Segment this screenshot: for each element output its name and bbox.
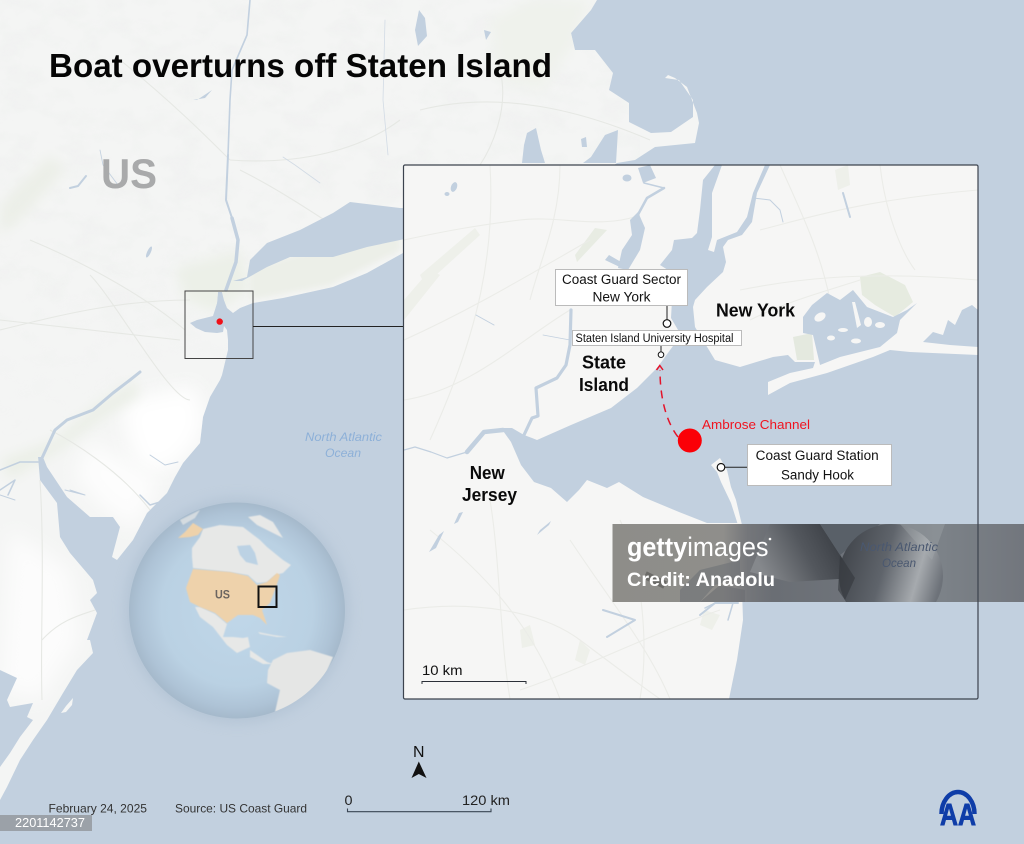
overview map: land xyxy=(0,0,699,800)
inset map panel xyxy=(404,165,978,699)
inset scale bar: 10 km: 10 km xyxy=(422,663,462,678)
overview locator box xyxy=(185,291,404,358)
inset: Jamaica Bay xyxy=(803,290,917,365)
watermark band: gettyimages credit: Credit: Anadolu xyxy=(627,570,775,591)
watermark band: gettyimages credit xyxy=(612,524,1024,602)
callout: Coast Guard Station Sandy Hook: Sandy Hook xyxy=(781,468,854,482)
inset dashed route arrow xyxy=(656,366,678,437)
inset: land xyxy=(404,165,978,699)
globe: United States xyxy=(186,569,280,625)
image id tag xyxy=(0,815,92,831)
inset ocean label under watermark: North Atlantic xyxy=(860,540,938,554)
image id tag: 2201142737 xyxy=(15,816,85,830)
inset: lakes and rivers xyxy=(429,165,656,552)
callout: Coast Guard Sector New York: New York xyxy=(592,290,651,304)
label: US: US xyxy=(101,150,157,197)
label: State Island xyxy=(579,352,629,395)
source: Source: US Coast Guard xyxy=(175,802,307,816)
north arrow: N xyxy=(413,744,424,761)
date: February 24, 2025 xyxy=(48,802,147,816)
inset ocean label under watermark: Ocean xyxy=(882,556,916,570)
label: State Island: State xyxy=(582,352,626,372)
inset: Jamaica Bay islands xyxy=(813,302,885,344)
label: New Jersey: New xyxy=(470,463,506,483)
globe: Mexico and Central America xyxy=(195,607,287,664)
inset: parks and urban tint xyxy=(404,165,913,665)
overview map: water bodies xyxy=(0,0,618,767)
callout: Coast Guard Station Sandy Hook: Coast Guard Station xyxy=(756,448,879,463)
globe locator box xyxy=(258,586,276,607)
inset scale bar: 10 km xyxy=(422,663,526,684)
overview scale bar: 120 km: 120 km xyxy=(462,793,510,808)
connector line to inset xyxy=(253,326,404,328)
label: New Jersey: Jersey xyxy=(462,485,517,505)
inset frame xyxy=(404,165,978,699)
ocean label: North Atlantic Ocean: North Atlantic xyxy=(305,430,382,444)
globe: Hudson Bay xyxy=(237,545,258,565)
ocean label: North Atlantic Ocean: Ocean xyxy=(325,446,361,460)
north arrow xyxy=(412,744,426,778)
globe: South America xyxy=(267,650,333,712)
overview scale bar: 120 km xyxy=(344,793,510,812)
locator red dot xyxy=(216,318,223,325)
globe inset xyxy=(124,498,350,724)
overview scale bar: 120 km: 0 xyxy=(344,793,352,808)
inset: roads xyxy=(404,165,978,699)
watermark band: gettyimages credit: gettyimages xyxy=(627,532,768,562)
inset: ocean, bays and rivers xyxy=(501,165,978,699)
label: State Island: Island xyxy=(579,375,629,395)
label: New York: New York xyxy=(716,300,796,320)
globe: Canada and Greenland xyxy=(180,510,291,583)
callout: Coast Guard Sector New York: Coast Guard Sector xyxy=(562,272,681,287)
label: New Jersey xyxy=(462,463,517,505)
inset: Sandy Hook spit xyxy=(711,458,742,525)
incident red dot xyxy=(678,428,702,452)
callout: Coast Guard Sector New York xyxy=(556,270,688,327)
ocean label: North Atlantic Ocean xyxy=(305,430,382,460)
Anadolu Agency logo: AA xyxy=(940,797,976,832)
label: Ambrose Channel: Ambrose Channel xyxy=(702,417,810,432)
callout: Staten Island University Hospital: Staten Island University Hospital xyxy=(576,333,734,345)
callout: Staten Island University Hospital xyxy=(572,330,742,358)
title: Boat overturns off Staten Island xyxy=(49,47,552,84)
inset: Long Beach water xyxy=(923,305,978,347)
globe label: US: US xyxy=(215,588,230,602)
globe: Alaska xyxy=(178,523,203,538)
inset ocean label under watermark xyxy=(860,542,938,567)
callout: Coast Guard Station Sandy Hook xyxy=(717,444,892,486)
